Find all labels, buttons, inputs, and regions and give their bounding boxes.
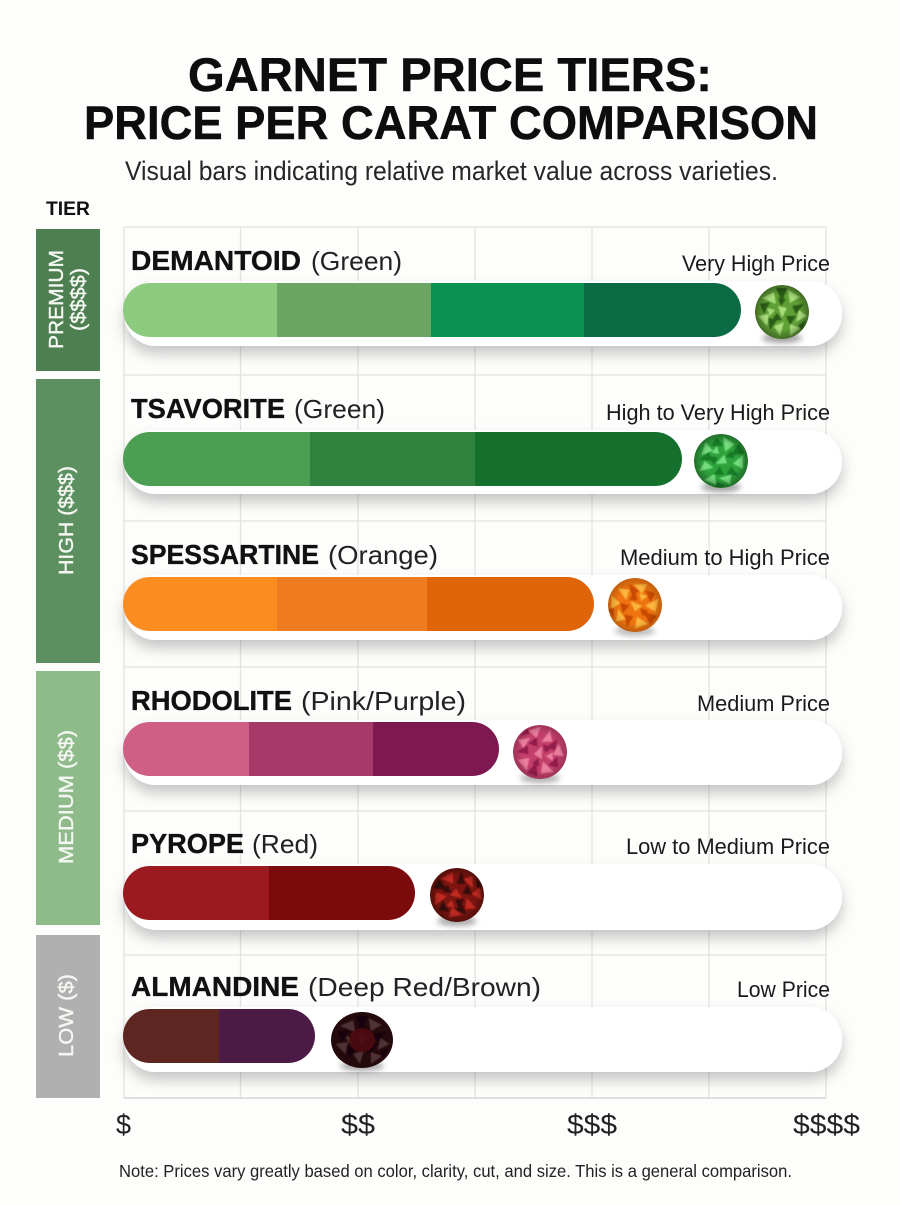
label: demantoid: [131, 245, 402, 276]
track: [124, 864, 842, 930]
x axis labels: $$$$: [793, 1109, 860, 1140]
bar: spessartine: [123, 577, 594, 631]
price label: medium to high: Medium to High Price: [620, 545, 830, 570]
title: [84, 48, 818, 149]
icon: pyrope gem: [430, 868, 484, 930]
tier: premium: PREMIUM: [46, 250, 68, 349]
bar: rhodolite: [123, 722, 499, 776]
label: rhodolite: RHODOLITE: [131, 685, 292, 716]
label: almandine: (Deep Red/Brown): [308, 972, 541, 1002]
row: rhodolite: [123, 685, 842, 785]
label: rhodolite: [131, 685, 466, 716]
icon: rhodolite gem: [513, 725, 567, 786]
icon: tsavorite gem: [694, 434, 748, 495]
price label: low: Low Price: [737, 977, 830, 1002]
row: spessartine: [123, 539, 842, 640]
label: pyrope: [131, 828, 318, 859]
label: demantoid: DEMANTOID: [131, 245, 301, 276]
tier: medium: MEDIUM ($$): [56, 730, 78, 864]
price label: high to very high: High to Very High Price: [606, 400, 830, 425]
label: spessartine: SPESSARTINE: [131, 539, 319, 570]
track: [124, 281, 842, 346]
row: tsavorite: [123, 393, 842, 495]
label: pyrope: PYROPE: [131, 828, 244, 859]
chart grid: [124, 227, 826, 1098]
track: [124, 430, 842, 494]
tier: premium: ($$$$): [68, 268, 90, 331]
icon: almandine gem: [331, 1012, 393, 1071]
label: almandine: [131, 971, 541, 1002]
row: pyrope: [123, 828, 842, 930]
title: PRICE PER CARAT COMPARISON: [84, 96, 818, 149]
tier: low: [36, 935, 100, 1098]
tier: high: [36, 379, 100, 663]
subtitle: Visual bars indicating relative market value across varieties.: [125, 156, 778, 186]
x axis labels: $: [116, 1109, 131, 1140]
label: spessartine: [131, 539, 438, 570]
price label: low to medium: Low to Medium Price: [626, 834, 830, 859]
bar: demantoid: [123, 283, 741, 337]
x axis labels: $$: [341, 1109, 375, 1140]
track: [124, 720, 842, 785]
label: spessartine: (Orange): [328, 540, 438, 570]
row: almandine: [123, 971, 842, 1072]
bar: almandine: [123, 1009, 315, 1063]
track: [124, 1007, 842, 1072]
row: demantoid: [123, 245, 842, 346]
label: tsavorite: [131, 393, 385, 424]
tier: high: HIGH ($$$): [56, 466, 78, 575]
tier: low: LOW ($): [56, 974, 78, 1057]
label: tsavorite: (Green): [294, 394, 385, 424]
tier: premium: [36, 229, 100, 371]
label: pyrope: (Red): [252, 829, 318, 859]
price label: medium: Medium Price: [697, 691, 830, 716]
tier column: [36, 229, 100, 1098]
label: demantoid: (Green): [311, 246, 402, 276]
icon: demantoid gem: [755, 285, 809, 343]
tier: medium: [36, 671, 100, 925]
title: GARNET PRICE TIERS:: [188, 48, 712, 101]
x axis labels: $$$: [567, 1109, 617, 1140]
tier column heading: TIER: [46, 199, 90, 220]
footnote: Note: Prices vary greatly based on color, clarity, cut, and size. This is a general comparison.: [119, 1161, 792, 1181]
label: almandine: ALMANDINE: [131, 971, 299, 1002]
label: tsavorite: TSAVORITE: [131, 393, 285, 424]
bar: pyrope: [123, 866, 415, 920]
label: rhodolite: (Pink/Purple): [301, 686, 466, 716]
icon: spessartine gem: [608, 578, 662, 640]
price label: very high: Very High Price: [682, 251, 830, 276]
track: [124, 575, 842, 640]
bar: tsavorite: [123, 432, 682, 486]
x axis labels: [116, 1109, 860, 1140]
